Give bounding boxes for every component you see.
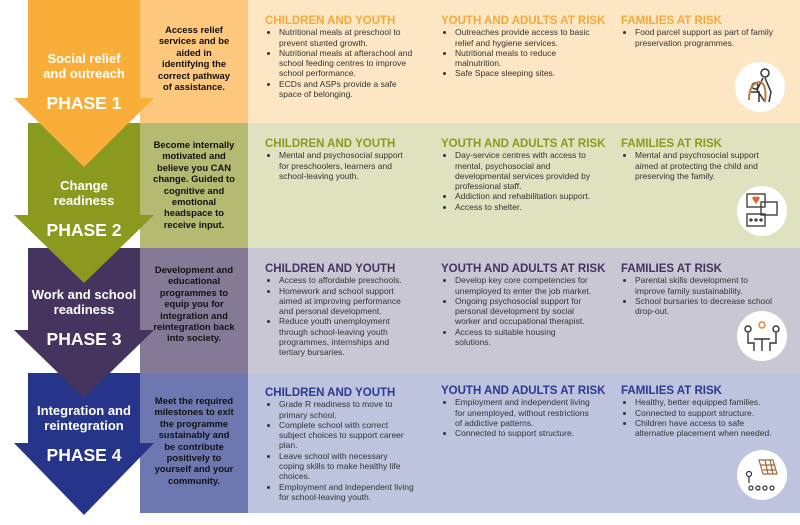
row4 families xyxy=(621,385,772,438)
phase 1 label: PHASE 1 xyxy=(47,93,121,113)
phase 3 label: Work and school xyxy=(32,287,136,302)
row4 youth: Employment and independent living for unemployed, without restrictions of addictive patterns. xyxy=(455,397,590,428)
row3 youth: YOUTH AND ADULTS AT RISK xyxy=(441,263,605,275)
phase 4 label xyxy=(37,403,131,465)
phase 4 label: PHASE 4 xyxy=(47,445,121,465)
row3 children: Reduce youth unemployment through school-leaving youth programmes, internships and tertiary bursaries. xyxy=(279,316,390,357)
row2 families xyxy=(621,138,759,181)
phase 2 label xyxy=(47,178,121,240)
icon: group xyxy=(737,450,787,500)
row2 families: Mental and psychosocial support aimed at protecting the child and preserving the family. xyxy=(635,150,759,181)
desc 4: Meet the required milestones to exit the programme sustainably and be contribute positively to yourself and your community. xyxy=(154,395,234,486)
phase 1 label: Social relief xyxy=(48,51,120,66)
row1 youth: Nutritional meals to reduce malnutrition. xyxy=(455,48,556,68)
row1 children: ECDs and ASPs provide a safe space of belonging. xyxy=(279,79,397,99)
row4 families: Connected to support structure. xyxy=(635,408,754,418)
row4 youth xyxy=(441,385,606,438)
desc 1: Access relief services and be aided in identifying the correct pathway of assistance. xyxy=(158,24,230,92)
row4 children: Employment and independent living for school-leaving youth. xyxy=(279,482,414,502)
icon: speech bubbles xyxy=(737,186,787,236)
row2 youth: Day-service centres with access to mental, psychosocial and developmental services provided by professional staff. xyxy=(455,150,590,191)
row3 families: FAMILIES AT RISK xyxy=(621,263,722,275)
row1 youth: Safe Space sleeping sites. xyxy=(455,68,555,78)
row1 children: Nutritional meals at afterschool and school feeding centres to improve school performance. xyxy=(279,48,412,78)
phase 3 label xyxy=(32,287,136,349)
phase 4 label: Integration and xyxy=(37,403,131,418)
row4 families: Healthy, better equipped families. xyxy=(635,397,761,407)
row2 children xyxy=(265,138,403,181)
phase arrows xyxy=(14,0,154,515)
phase 2 label: PHASE 2 xyxy=(47,220,121,240)
row3 youth: Develop key core competencies for unemployed to enter the job market. xyxy=(455,275,591,296)
row1 children xyxy=(265,15,412,99)
row3 youth: Ongoing psychosocial support for personal development by social worker and occupational therapist. xyxy=(455,296,584,326)
row4 families: FAMILIES AT RISK xyxy=(621,385,722,397)
row1 children: Nutritional meals at preschool to prevent stunted growth. xyxy=(279,27,400,48)
row3 youth xyxy=(441,263,606,347)
row2 youth xyxy=(441,138,606,212)
row2 families: FAMILIES AT RISK xyxy=(621,138,722,150)
row1 youth xyxy=(441,15,606,78)
phase 2 label: Change xyxy=(60,178,108,193)
row4 children xyxy=(265,387,414,502)
phase 3 label: readiness xyxy=(54,302,114,317)
row1 families: FAMILIES AT RISK xyxy=(621,15,722,27)
row3 families xyxy=(621,263,772,316)
row2 children: CHILDREN AND YOUTH xyxy=(265,138,395,150)
row2 children: Mental and psychosocial support for preschoolers, learners and school-leaving youth. xyxy=(279,150,403,181)
icon: caregiver xyxy=(735,62,785,112)
icon: meeting xyxy=(737,311,787,361)
row3 children: CHILDREN AND YOUTH xyxy=(265,263,395,275)
desc 2: Become internally motivated and believe you CAN change. Guided to cognitive and emotional headspace to receive input. xyxy=(153,139,235,230)
row3 children xyxy=(265,263,402,357)
row3 families: School bursaries to decrease school drop-out. xyxy=(635,296,772,316)
row1 families xyxy=(621,15,773,48)
phase 1 label: and outreach xyxy=(43,66,125,81)
row1 children: CHILDREN AND YOUTH xyxy=(265,15,395,27)
row3 children: Homework and school support aimed at improving performance and personal development. xyxy=(279,286,401,316)
row1 families: Food parcel support as part of family preservation programmes. xyxy=(635,27,773,48)
row4 children: Leave school with necessary coping skills to make healthy life choices. xyxy=(279,451,400,481)
row4 children: Complete school with correct subject choices to support career plan. xyxy=(279,420,404,450)
row3 children: Access to affordable preschools. xyxy=(279,275,402,285)
row3 youth: Access to suitable housing solutions. xyxy=(455,327,556,347)
row4 children: CHILDREN AND YOUTH xyxy=(265,387,395,399)
row1 youth: Outreaches provide access to basic relief and hygiene services. xyxy=(455,27,590,48)
row1 youth: YOUTH AND ADULTS AT RISK xyxy=(441,15,605,27)
row2 youth: Addiction and rehabilitation support. xyxy=(455,191,590,201)
row4 families: Children have access to safe alternative placement when needed. xyxy=(635,418,772,438)
row3 families: Parental skills development to improve family sustainability. xyxy=(635,275,748,296)
phase 1 label xyxy=(43,51,125,113)
row2 youth: YOUTH AND ADULTS AT RISK xyxy=(441,138,605,150)
phase 4 label: reintegration xyxy=(44,418,124,433)
row4 youth: Connected to support structure. xyxy=(455,428,574,438)
row4 youth: YOUTH AND ADULTS AT RISK xyxy=(441,385,605,397)
desc 3: Development and educational programmes to equip you for integration and reintegration back into society. xyxy=(153,264,235,343)
row2 youth: Access to shelter. xyxy=(455,202,522,212)
row4 children: Grade R readiness to move to primary school. xyxy=(279,399,392,420)
phase 3 label: PHASE 3 xyxy=(47,329,121,349)
phase 2 label: readiness xyxy=(54,193,114,208)
